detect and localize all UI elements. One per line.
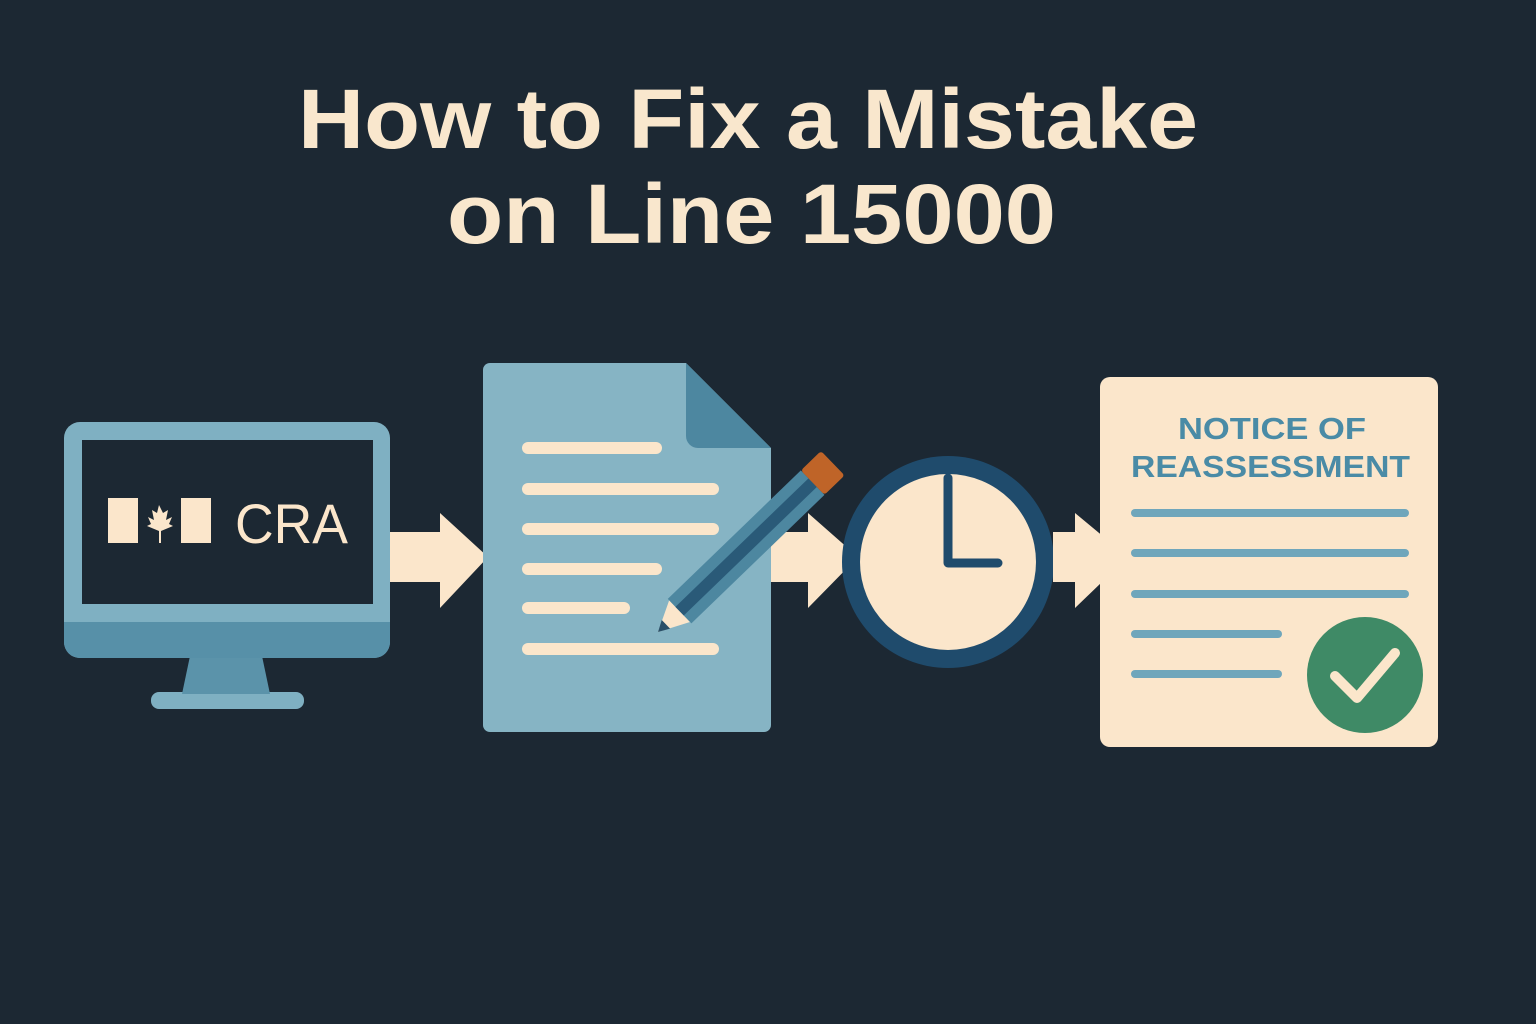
CRA text: CRA: [235, 492, 349, 555]
title: [298, 72, 1198, 261]
icon: monitor with CRA: [64, 422, 390, 709]
pencil: [646, 451, 845, 644]
arrow 2: [771, 513, 858, 608]
panel: notice of reassessment: NOTICE OF: [1178, 411, 1366, 446]
panel: notice of reassessment: REASSESSMENT: [1131, 449, 1410, 484]
icon: document with pencil: [483, 363, 845, 732]
arrow 3: [1053, 513, 1128, 608]
icon: clock: [842, 456, 1054, 668]
arrow 1: [390, 513, 488, 608]
flag: [108, 498, 211, 543]
title: How to Fix a Mistake: [298, 72, 1198, 166]
panel: notice of reassessment: [1100, 377, 1438, 747]
icon: check badge: [1307, 617, 1423, 733]
title: on Line 15000: [447, 167, 1056, 261]
